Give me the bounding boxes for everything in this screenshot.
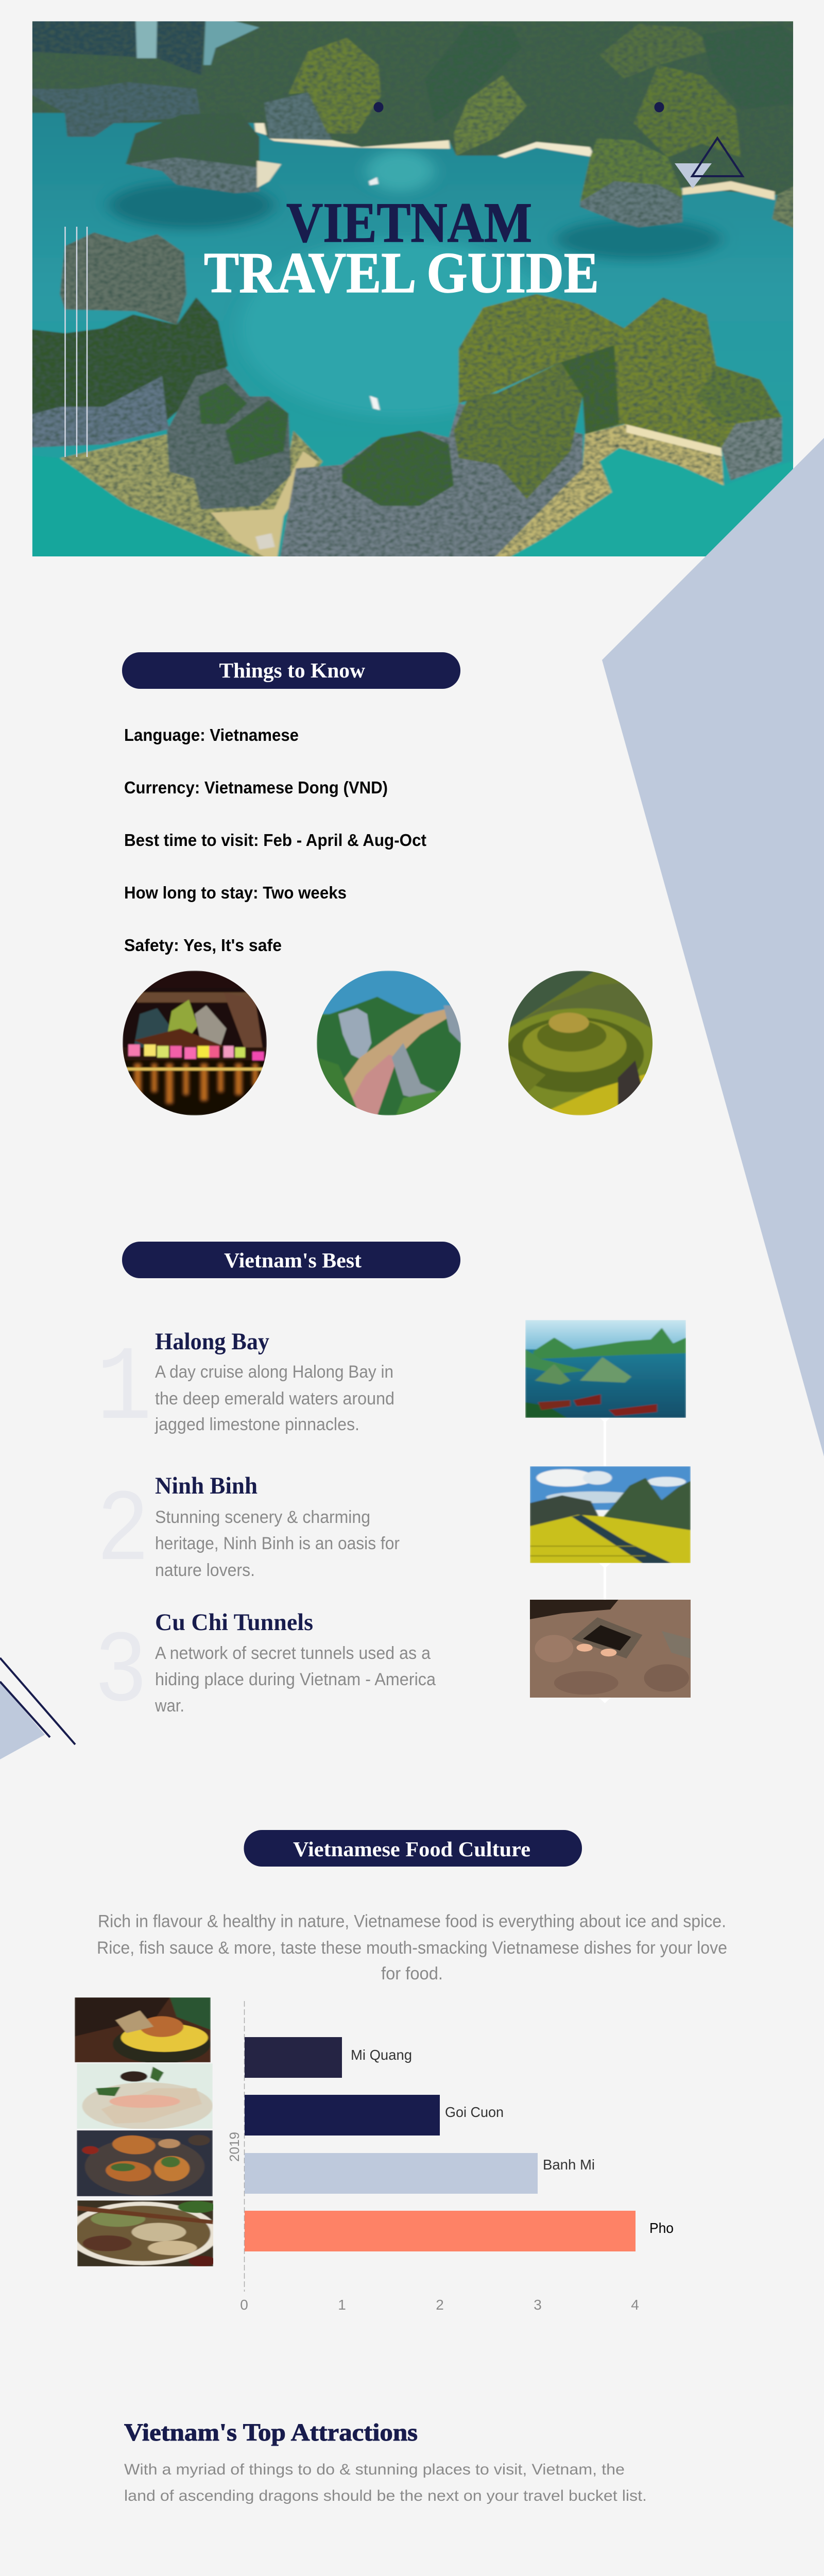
bar: Goi Cuon — [245, 2095, 440, 2136]
photo: Goi Cuon — [77, 2063, 213, 2129]
panel: things to know facts: Currency: Vietnamese Dong (VND) — [124, 778, 388, 797]
axis ticks: 2 — [436, 2297, 444, 2313]
decoration: triangles on hero — [675, 138, 743, 189]
bar: Pho — [245, 2211, 636, 2251]
bar labels — [351, 2047, 674, 2236]
photo: Cu Chi tunnel hole — [530, 1600, 691, 1698]
item 2: Ninh Binh: Stunning scenery & charming — [155, 1507, 370, 1527]
panel: things to know facts: Safety: Yes, It's safe — [124, 936, 282, 955]
bar: Mi Quang — [245, 2037, 342, 2078]
item 1: Halong Bay: A day cruise along Halong Bay in — [155, 1362, 393, 1382]
bar labels: Goi Cuon — [445, 2104, 504, 2120]
photo: golden bridge hands — [317, 971, 461, 1115]
bar labels: Mi Quang — [351, 2047, 412, 2063]
item 3: Cu Chi Tunnels: war. — [154, 1696, 184, 1716]
text: attractions intro — [124, 2461, 647, 2504]
hero photo: Halong Bay aerial — [21, 14, 804, 564]
decoration: bottom-left triangle and lines — [0, 1658, 75, 1759]
photo: rice terraces — [508, 971, 653, 1115]
axis ticks: 3 — [534, 2297, 542, 2313]
text: food intro: Rich in flavour & healthy in nature, Vietnamese food is everything about ice and spice. — [98, 1911, 726, 1931]
panel: things to know facts: Language: Vietnamese — [124, 725, 299, 744]
item 3: Cu Chi Tunnels — [96, 1609, 436, 1721]
photo: floating lanterns — [123, 971, 267, 1115]
heading: Vietnam's Best: Vietnam's Best — [224, 1248, 362, 1272]
axis ticks: 0 — [240, 2297, 248, 2313]
bar: Banh Mi — [245, 2153, 538, 2194]
photo: Pho — [77, 2200, 213, 2266]
item 2: Ninh Binh: Ninh Binh — [155, 1472, 258, 1499]
decoration: dots on hero — [374, 102, 664, 112]
panel: things to know facts: How long to stay: Two weeks — [124, 883, 347, 902]
decoration: vertical lines on hero — [65, 227, 87, 457]
item 2: Ninh Binh: heritage, Ninh Binh is an oasis for — [155, 1534, 400, 1553]
text: attractions intro: With a myriad of things to do & stunning places to visit, Vietnam, the — [124, 2461, 625, 2478]
title: TRAVEL GUIDE — [204, 241, 599, 305]
item 2: Ninh Binh — [98, 1471, 400, 1580]
item 3: Cu Chi Tunnels: Cu Chi Tunnels — [155, 1609, 313, 1636]
axis ticks — [240, 2297, 639, 2313]
heading: Things to Know — [122, 652, 460, 689]
number 3: 3 — [96, 1612, 146, 1721]
heading: Vietnam's Best — [122, 1242, 460, 1278]
heading: Vietnamese Food Culture: Vietnamese Food Culture — [293, 1837, 530, 1861]
text: food intro — [97, 1911, 727, 1984]
item 1: Halong Bay: jagged limestone pinnacles. — [154, 1415, 359, 1434]
title: VIETNAM — [286, 191, 532, 254]
heading: Vietnam's Top Attractions: Vietnam's Top Attractions — [124, 2419, 418, 2446]
photo: Ninh Binh fields — [530, 1466, 691, 1563]
heading: Things to Know: Things to Know — [219, 658, 365, 682]
bar labels: Banh Mi — [543, 2157, 595, 2173]
item 3: Cu Chi Tunnels: A network of secret tunnels used as a — [155, 1643, 431, 1663]
axis ticks: 1 — [338, 2297, 346, 2313]
heading: Vietnamese Food Culture — [244, 1830, 582, 1867]
panel: things to know facts — [124, 725, 426, 955]
number 1: 1 — [96, 1330, 152, 1450]
bar labels: Pho — [649, 2220, 674, 2236]
title — [204, 191, 599, 305]
text: food intro: Rice, fish sauce & more, taste these mouth-smacking Vietnamese dishes for your love — [97, 1938, 727, 1958]
item 3: Cu Chi Tunnels: hiding place during Vietnam - America — [155, 1670, 436, 1689]
panel: things to know facts: Best time to visit: Feb - April & Aug-Oct — [124, 831, 426, 850]
text: food intro: for food. — [381, 1964, 443, 1984]
background: large pale polygon — [602, 438, 824, 1456]
photo: Mi Quang — [75, 1997, 211, 2062]
item 2: Ninh Binh: nature lovers. — [155, 1561, 255, 1580]
item 1: Halong Bay — [96, 1328, 394, 1450]
photo: Banh Mi — [77, 2130, 213, 2196]
bar chart: Vietnamese dishes — [227, 2001, 674, 2313]
connector line between photos — [599, 1418, 611, 1703]
text: attractions intro: land of ascending dragons should be the next on your travel bucket list. — [124, 2487, 647, 2504]
axis ticks: 4 — [631, 2297, 639, 2313]
photo: Halong Bay boats — [525, 1320, 686, 1418]
item 1: Halong Bay: Halong Bay — [155, 1328, 269, 1355]
number 2: 2 — [98, 1471, 148, 1580]
axis label: 2019: 2019 — [227, 2132, 242, 2162]
item 1: Halong Bay: the deep emerald waters around — [155, 1389, 394, 1409]
